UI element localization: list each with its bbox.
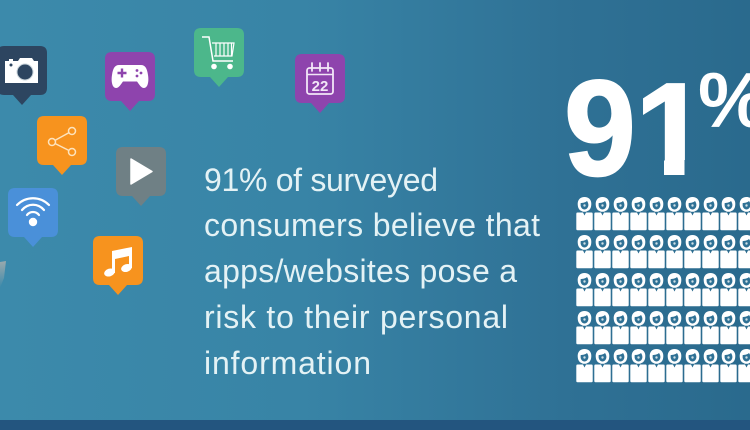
text block: survey statement: information: [204, 345, 371, 381]
icon: camera pin: [0, 46, 47, 105]
icon: wifi pin: [8, 188, 58, 247]
headline figure: 91%: [568, 72, 750, 178]
icon: music note pin: [93, 236, 143, 295]
headline figure: 91%: 9: [564, 53, 636, 205]
text block: survey statement: apps/websites pose a: [204, 253, 517, 289]
text block: survey statement: consumers believe that: [204, 207, 540, 243]
icon: cropped grey pin at left edge: [0, 261, 6, 288]
icon: game controller pin: [105, 52, 155, 111]
icon: calendar pin: [295, 54, 345, 113]
text block: survey statement: risk to their personal: [204, 299, 508, 335]
pictogram: rows of people: [576, 197, 750, 382]
icon: share pin: [37, 116, 87, 175]
icon: shopping cart pin: [194, 28, 244, 87]
icon: calendar pin: 22: [312, 78, 328, 95]
headline figure: 91%: 1: [635, 56, 708, 203]
text block: survey statement: [204, 162, 540, 381]
bottom band: [0, 420, 750, 430]
text block: survey statement: 91% of surveyed: [204, 162, 438, 198]
icon: video play pin: [116, 147, 166, 206]
